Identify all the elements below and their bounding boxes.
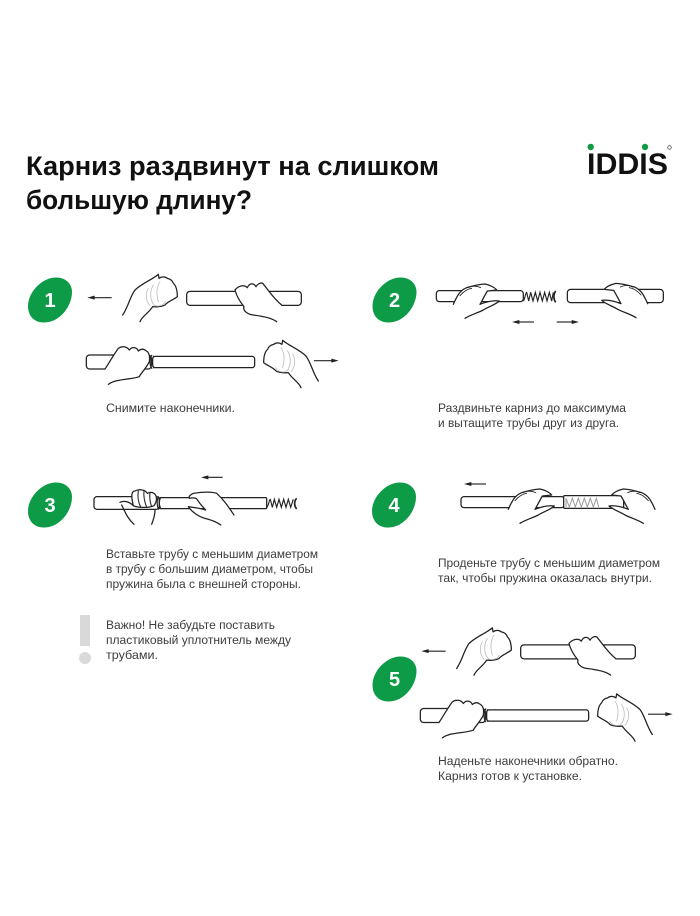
illustration: insert tube (94, 475, 297, 525)
spring end (295, 498, 297, 509)
badge 1: 1 (44, 290, 56, 312)
wide tube (564, 496, 624, 508)
narrow tube (461, 497, 564, 508)
title: Карниз раздвинут на слишком (26, 151, 439, 181)
narrower tube (159, 498, 267, 509)
caption 2: Раздвиньте карниз до максимума (438, 401, 626, 415)
illustration: put end caps back (420, 628, 673, 741)
left hand (453, 284, 499, 318)
caption 4: Проденьте трубу с меньшим диаметром (438, 556, 660, 570)
badge 5: 5 (389, 669, 400, 691)
wider tube (94, 497, 159, 509)
caption 3: Вставьте трубу с меньшим диаметром (106, 547, 318, 561)
caption 5: Наденьте наконечники обратно. (438, 754, 618, 768)
caption 5: Карниз готов к установке. (438, 769, 582, 783)
caption 1: Снимите наконечники. (106, 401, 235, 415)
spring end (554, 291, 556, 302)
arrow: left (512, 320, 534, 324)
caption 4: так, чтобы пружина оказалась внутри. (438, 571, 652, 585)
illustration: pull tubes apart (436, 283, 663, 324)
arrow: left (464, 482, 486, 486)
warning note: пластиковый уплотнитель между (106, 633, 292, 647)
arrow: left (201, 475, 223, 479)
badge 1 (28, 278, 72, 322)
right hand (188, 492, 234, 525)
logo: IDDIS: IDDIS (587, 148, 668, 181)
caption 3: в трубу с большим диаметром, чтобы (106, 562, 313, 576)
caption 4 (438, 556, 660, 585)
spring (267, 499, 293, 507)
panel: step 1 (28, 274, 339, 415)
caption 2 (438, 401, 626, 430)
badge 2 (372, 278, 416, 322)
left tube (436, 291, 523, 302)
right hand (609, 489, 655, 523)
left hand (508, 489, 554, 523)
icon: exclamation mark (79, 615, 91, 664)
badge 3 (28, 482, 72, 528)
right hand (602, 283, 648, 318)
badge 4 (372, 482, 416, 528)
badge 4: 4 (388, 495, 400, 517)
panel: step 5 (372, 628, 673, 783)
spring (523, 292, 553, 301)
panel: step 4 (372, 482, 660, 585)
caption 3 (106, 547, 318, 591)
illustration: slide tube through (461, 482, 655, 523)
title (26, 151, 439, 215)
illustration: remove end caps (86, 274, 339, 388)
warning note: Важно! Не забудьте поставить (106, 618, 275, 632)
title: большую длину? (26, 185, 252, 215)
badge 3: 3 (44, 495, 56, 517)
warning note: трубами. (106, 648, 158, 662)
panel: step 2 (372, 278, 663, 430)
badge 2: 2 (389, 290, 400, 312)
gripping hand (120, 490, 156, 507)
hidden spring (566, 498, 599, 507)
caption 3: пружина была с внешней стороны. (106, 577, 301, 591)
warning note (106, 618, 292, 662)
arrow: right (557, 320, 579, 324)
panel: step 3 (28, 475, 318, 664)
badge 5 (372, 656, 416, 702)
right tube (567, 289, 663, 303)
caption 2: и вытащите трубы друг из друга. (438, 416, 619, 430)
caption 5 (438, 754, 618, 783)
collar (157, 496, 161, 510)
